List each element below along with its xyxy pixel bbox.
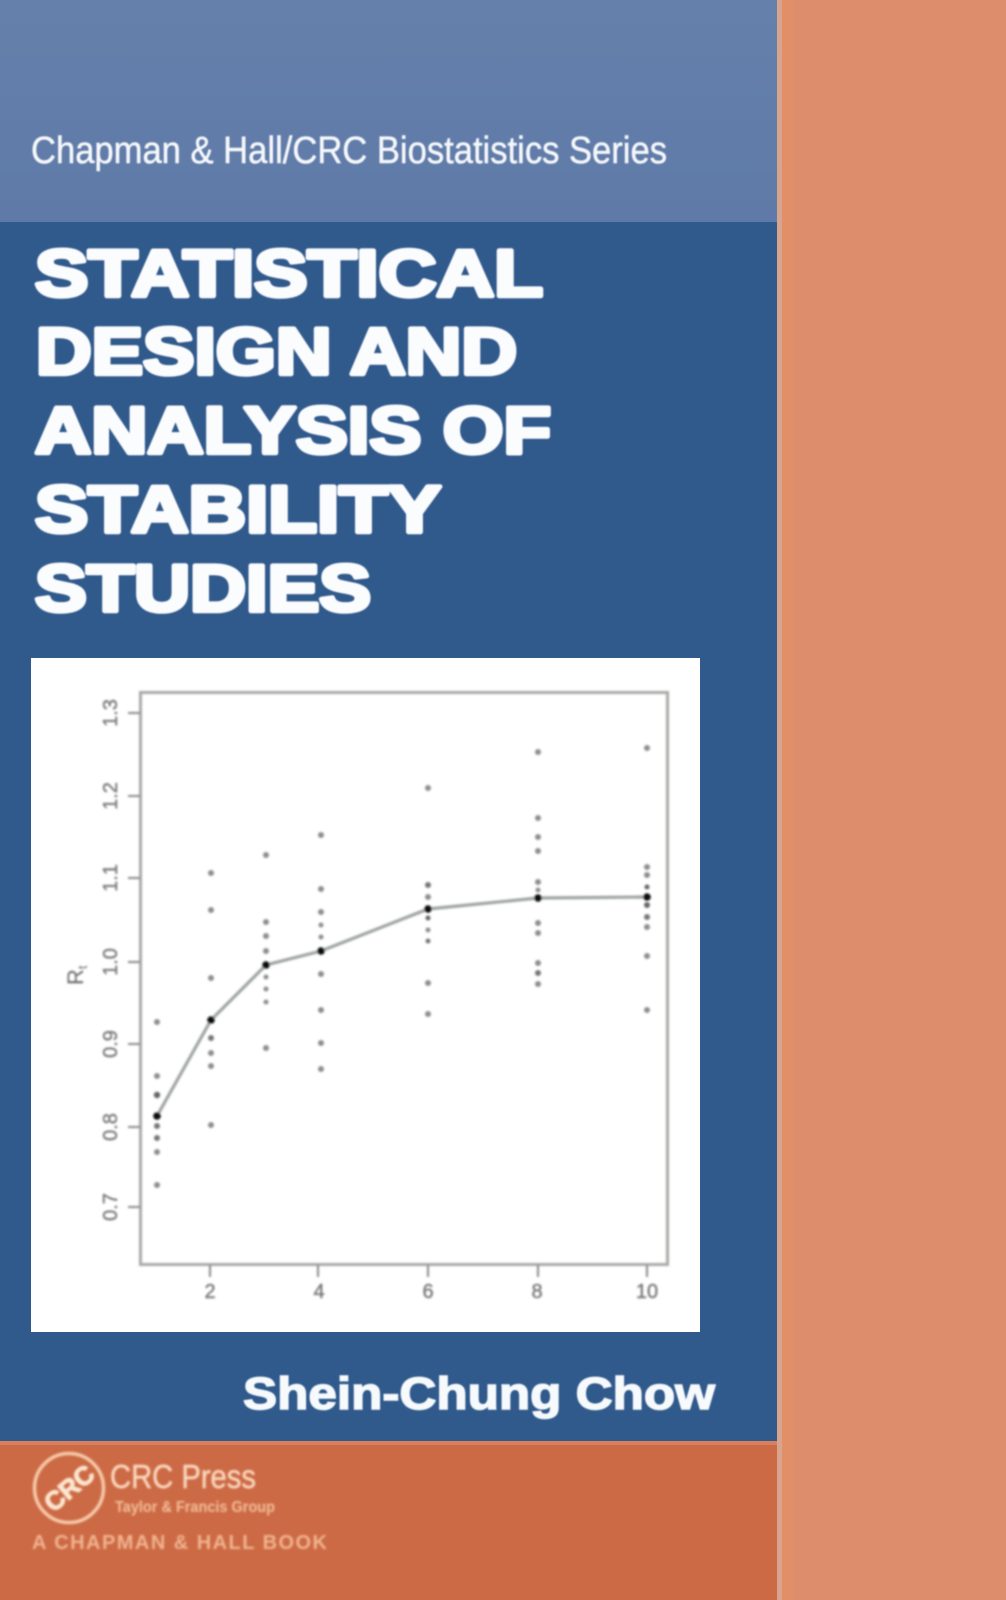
CRC Press wordmark: CRC Press bbox=[110, 1458, 256, 1495]
y axis labels: 0.8 bbox=[100, 1113, 122, 1141]
y axis labels: 1.1 bbox=[100, 864, 122, 892]
publisher logo bbox=[32, 1454, 328, 1554]
y axis labels: 1.0 bbox=[100, 948, 122, 976]
y axis labels: 1.2 bbox=[100, 782, 122, 810]
scatter points bbox=[154, 745, 650, 1188]
y axis labels: 1.3 bbox=[100, 699, 122, 727]
y axis ticks bbox=[128, 713, 140, 1207]
panel: publisher band bbox=[0, 1441, 777, 1600]
panel: blue cover area bbox=[0, 222, 777, 1441]
series name: Chapman & Hall/CRC Biostatistics Series bbox=[31, 130, 667, 172]
x axis labels: 4 bbox=[313, 1281, 325, 1303]
mean points bbox=[153, 893, 651, 1120]
panel: white chart card bbox=[31, 658, 700, 1332]
x axis labels: 10 bbox=[636, 1281, 658, 1303]
title: ANALYSIS OF bbox=[35, 393, 551, 467]
icon: CRC circle: CRC bbox=[38, 1458, 101, 1518]
title: STATISTICAL bbox=[35, 236, 543, 310]
x axis ticks bbox=[210, 1265, 647, 1277]
title bbox=[35, 236, 551, 625]
y axis labels: 0.9 bbox=[100, 1030, 122, 1058]
panel: series band bbox=[0, 0, 777, 222]
scatter chart with mean line bbox=[63, 692, 668, 1303]
Taylor and Francis Group: Taylor & Francis Group bbox=[115, 1499, 275, 1516]
mean line bbox=[157, 897, 647, 1116]
y axis title: t bbox=[75, 965, 90, 969]
y axis title: R bbox=[63, 969, 88, 985]
y axis labels bbox=[100, 699, 122, 1221]
x axis labels: 6 bbox=[422, 1281, 434, 1303]
author name: Shein-Chung Chow bbox=[243, 1368, 716, 1419]
y axis labels: 0.7 bbox=[100, 1193, 122, 1221]
x axis labels bbox=[204, 1281, 658, 1303]
A Chapman and Hall Book: A CHAPMAN & HALL BOOK bbox=[32, 1532, 328, 1554]
panel: orange spine bbox=[776, 0, 1006, 1600]
x axis labels: 2 bbox=[204, 1281, 216, 1303]
x axis labels: 8 bbox=[531, 1281, 543, 1303]
title: STUDIES bbox=[35, 551, 371, 625]
title: DESIGN AND bbox=[36, 314, 517, 388]
plot frame bbox=[140, 692, 668, 1264]
title: STABILITY bbox=[35, 472, 441, 546]
